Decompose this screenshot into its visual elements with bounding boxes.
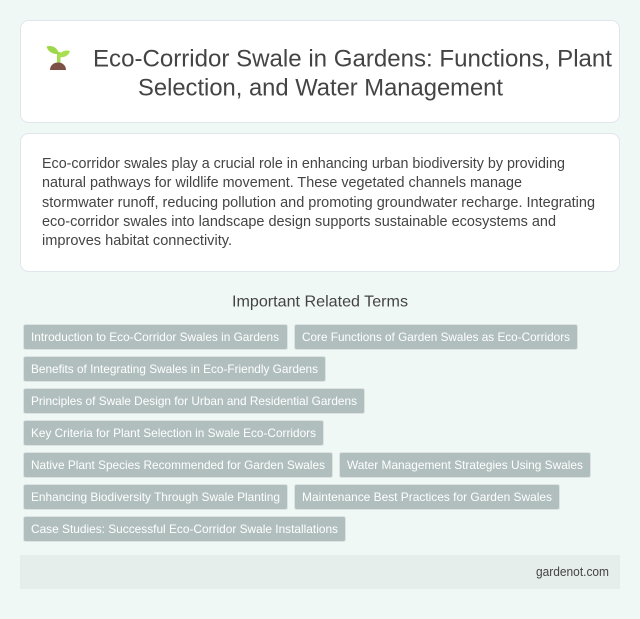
tag: introduction <box>24 324 288 350</box>
intro paragraph: stormwater runoff, reducing pollution and promoting groundwater recharge. Integrating <box>42 195 595 211</box>
tag: biodiversity <box>24 484 288 510</box>
panel: intro text card <box>20 134 620 272</box>
tag: water management <box>340 452 590 478</box>
tag: core functions: Core Functions of Garden Swales as Eco-Corridors <box>302 330 570 344</box>
tag: water management: Water Management Strategies Using Swales <box>347 458 583 472</box>
tag: case studies <box>24 516 346 542</box>
tag: key criteria: Key Criteria for Plant Selection in Swale Eco-Corridors <box>31 426 316 440</box>
tag: key criteria <box>24 420 324 446</box>
tag: case studies: Case Studies: Successful Eco-Corridor Swale Installations <box>31 522 338 536</box>
title <box>93 46 612 102</box>
tag: biodiversity: Enhancing Biodiversity Through Swale Planting <box>31 490 280 504</box>
intro paragraph <box>42 156 595 249</box>
tag: native plants: Native Plant Species Recommended for Garden Swales <box>31 458 325 472</box>
title: Eco-Corridor Swale in Gardens: Functions, Plant <box>93 46 612 72</box>
intro paragraph: improves habitat connectivity. <box>42 233 232 249</box>
tag: benefits: Benefits of Integrating Swales in Eco-Friendly Gardens <box>31 362 318 376</box>
tag: core functions <box>294 324 578 350</box>
panel: title card <box>20 20 620 122</box>
tag: native plants <box>24 452 332 478</box>
tag list <box>24 324 590 542</box>
tag: maintenance <box>294 484 560 510</box>
tag: maintenance: Maintenance Best Practices for Garden Swales <box>302 490 552 504</box>
footer: gardenot.com <box>536 564 609 579</box>
intro paragraph: eco-corridor swales into landscape design supports sustainable ecosystems and <box>42 214 556 230</box>
heading: important related terms: Important Related Terms <box>232 294 408 310</box>
tag: introduction: Introduction to Eco-Corridor Swales in Gardens <box>31 330 279 344</box>
title: Selection, and Water Management <box>138 74 503 102</box>
tag: principles <box>24 388 364 414</box>
intro paragraph: natural pathways for wildlife movement. These vegetated channels manage <box>42 175 522 191</box>
intro paragraph: Eco-corridor swales play a crucial role in enhancing urban biodiversity by providing <box>42 156 565 172</box>
icon: sprout <box>46 46 70 70</box>
tag: benefits <box>24 356 326 382</box>
tag: principles: Principles of Swale Design for Urban and Residential Gardens <box>31 394 357 408</box>
footer <box>20 555 620 589</box>
